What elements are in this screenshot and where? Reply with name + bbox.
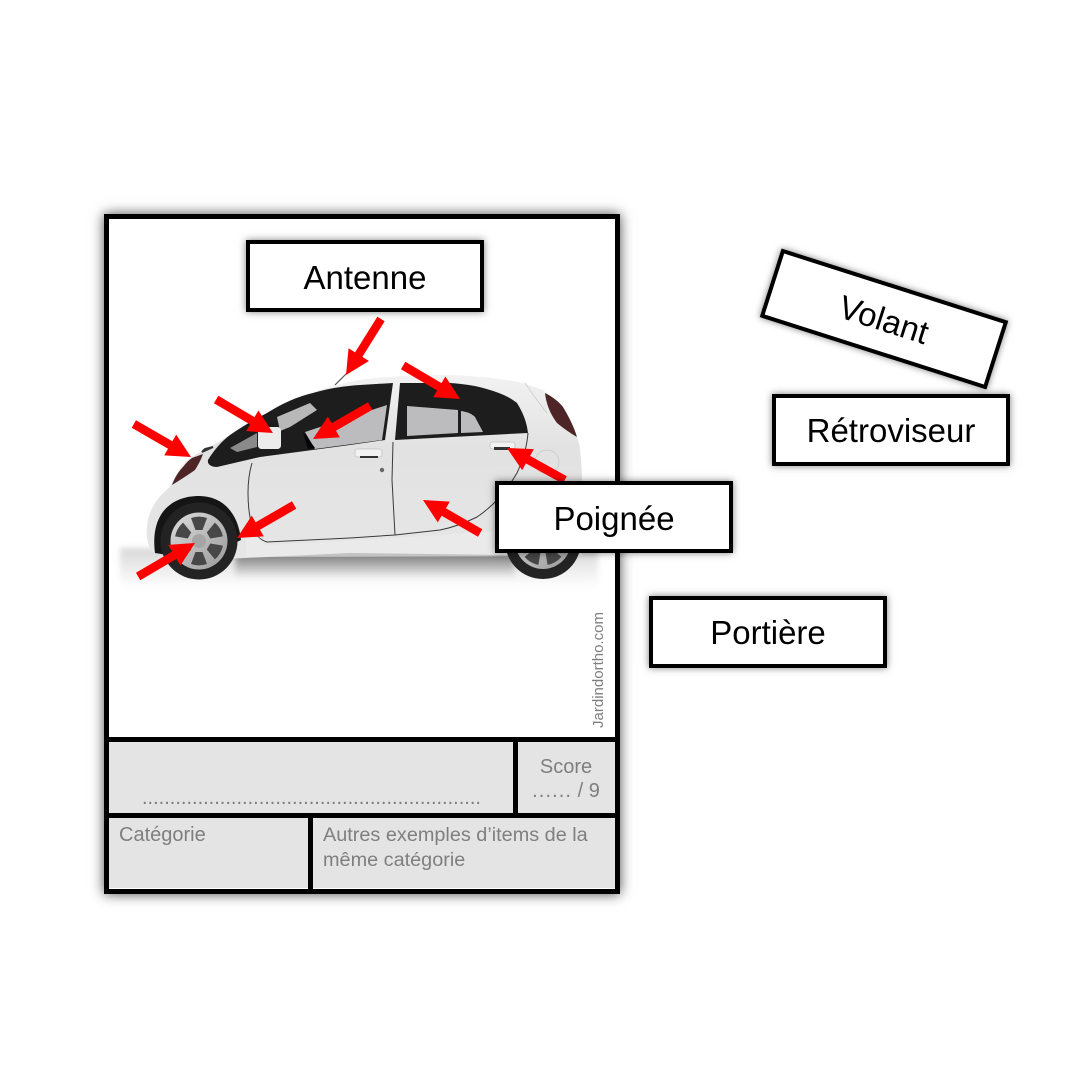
answer cell: ............................................................. [142,787,481,809]
windows [208,383,393,467]
arrow: antenne [336,313,391,381]
arrow: rétroviseur [210,389,279,443]
label: Antenne [246,240,484,312]
examples cell: Autres exemples d’items de la [323,824,588,846]
arrow: volant [307,396,376,449]
arrow: portière [417,490,486,543]
arrow: poignée [501,438,571,490]
label: Poignée: Poignée [553,500,675,537]
credit text: Jardindortho.com [590,612,607,728]
arrow: roue [132,533,201,587]
category cell [109,818,308,888]
score cell: ...... / 9 [532,780,600,802]
arrow: pneu [231,495,300,548]
arrow: toit [397,355,466,409]
car [120,373,598,588]
answer cell [109,742,513,814]
label: Poignée [495,481,733,553]
label: Rétroviseur [772,394,1010,466]
handles and mirror [355,449,382,457]
label: Volant: Volant [835,288,933,351]
rear wheel [505,503,581,579]
label: Portière [649,596,887,668]
examples cell [313,818,615,888]
category cell: Catégorie [119,824,206,846]
examples cell: même catégorie [323,849,465,871]
score cell [517,742,615,814]
label: Antenne: Antenne [304,259,426,296]
doors [248,433,528,542]
arrow: phare [128,414,197,467]
label: Volant [760,249,1008,389]
label: Portière: Portière [710,614,826,651]
score cell: Score [540,756,592,778]
lamps [545,393,577,437]
label: Rétroviseur: Rétroviseur [807,412,975,449]
front wheel [154,496,241,560]
divider lines [109,737,615,889]
panel: card [104,214,620,894]
